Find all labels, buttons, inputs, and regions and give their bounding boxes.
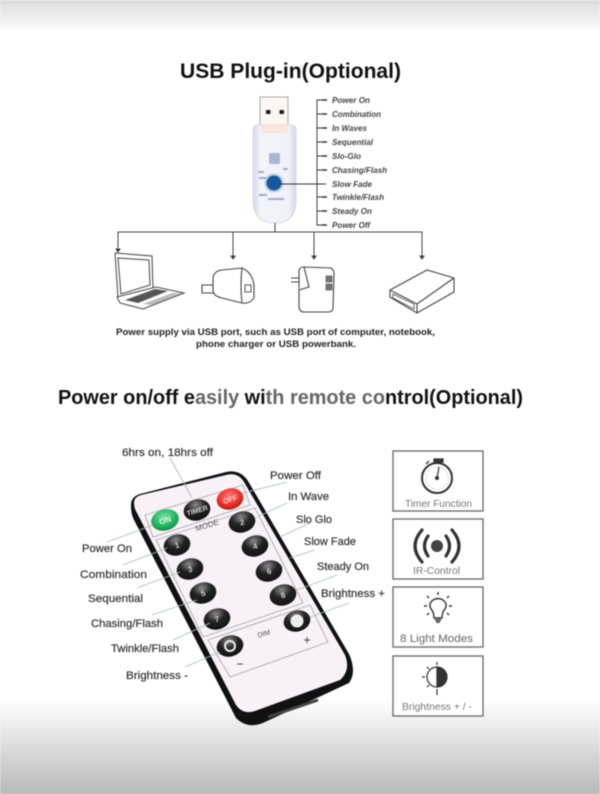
remote labels: Power Off xyxy=(270,470,322,482)
remote button legends: + xyxy=(303,633,311,647)
remote button legends: MODE xyxy=(194,518,220,533)
USB mode list connectors xyxy=(280,100,327,225)
caption: power supply: Power supply via USB port, such as USB port of computer, notebook, xyxy=(116,327,435,337)
remote button legends: 4 xyxy=(252,541,259,551)
remote button legends: 5 xyxy=(200,588,207,598)
remote labels: In Wave xyxy=(288,491,329,503)
USB mode list labels: Chasing/Flash xyxy=(332,165,387,175)
caption: power supply: phone charger or USB powerbank. xyxy=(196,339,356,349)
USB mode list labels: Power On xyxy=(332,95,370,105)
remote button legends: TIMER xyxy=(186,505,209,518)
remote button legends: 1 xyxy=(174,540,181,550)
panel: IR control: IR-Control xyxy=(413,566,460,577)
remote labels: Power On xyxy=(82,543,132,555)
USB mode list labels: Steady On xyxy=(332,206,372,216)
panel: timer function: Timer Function xyxy=(405,499,472,510)
panel: 8 light modes xyxy=(393,587,483,647)
remote labels: Twinkle/Flash xyxy=(111,643,179,655)
icon: half sun xyxy=(422,662,447,695)
remote button legends: 3 xyxy=(187,564,194,574)
icon: wall adapter xyxy=(291,267,334,312)
title: remote control: Power on/off easily with remote control(Optional) xyxy=(58,386,523,409)
USB mode list labels: Twinkle/Flash xyxy=(332,192,384,202)
caption: power supply xyxy=(116,327,435,349)
icon: light bulb xyxy=(424,592,452,622)
remote control xyxy=(131,471,353,725)
remote labels: Sequential xyxy=(88,593,143,605)
USB mode list labels: Power Off xyxy=(332,220,371,230)
panel: brightness: Brightness + / - xyxy=(402,702,472,713)
remote leader lines xyxy=(107,458,349,667)
background bottom shade xyxy=(0,700,600,794)
remote labels xyxy=(80,447,385,682)
remote labels: Steady On xyxy=(317,561,369,573)
remote button legends: 6 xyxy=(266,566,273,576)
remote labels: Slo Glo xyxy=(296,514,332,526)
USB dongle xyxy=(253,97,296,223)
USB mode list labels: Slow Fade xyxy=(332,179,372,189)
USB mode list labels: Combination xyxy=(332,109,381,119)
panel: brightness xyxy=(393,656,483,716)
background top shade xyxy=(0,0,600,29)
remote button legends: 2 xyxy=(239,517,246,527)
remote button groups outline xyxy=(145,485,328,677)
remote labels: Brightness - xyxy=(126,670,188,682)
icon: infrared waves xyxy=(415,530,459,562)
panel: 8 light modes: 8 Light Modes xyxy=(400,633,474,645)
remote buttons xyxy=(149,485,313,660)
remote button legends xyxy=(158,493,311,671)
remote labels: Combination xyxy=(80,569,147,581)
icon: stopwatch xyxy=(422,459,452,493)
remote button legends: OFF xyxy=(222,493,239,506)
remote labels: Slow Fade xyxy=(304,536,356,548)
USB mode list labels: Slo-Glo xyxy=(332,151,361,161)
USB mode list labels: Sequential xyxy=(332,137,374,147)
icon: power bank xyxy=(390,270,454,313)
remote labels: Chasing/Flash xyxy=(91,618,163,630)
remote labels: Brightness + xyxy=(321,588,385,600)
remote labels: 6hrs on, 18hrs off xyxy=(122,447,214,459)
power distribution arrows xyxy=(116,223,424,259)
USB mode list labels xyxy=(332,95,387,230)
USB mode list labels: In Waves xyxy=(332,123,367,133)
remote button legends: ON xyxy=(158,514,172,527)
panel: timer function xyxy=(393,451,483,511)
icon: laptop xyxy=(115,253,184,309)
icon: phone charger xyxy=(202,268,254,303)
remote button legends: DIM xyxy=(257,629,271,640)
panel: IR control xyxy=(393,519,483,579)
remote button legends: − xyxy=(236,657,244,671)
remote button legends: 8 xyxy=(280,590,287,600)
remote body xyxy=(131,471,353,725)
title: USB plug-in: USB Plug-in(Optional) xyxy=(180,60,401,83)
remote button legends: 7 xyxy=(214,614,221,624)
